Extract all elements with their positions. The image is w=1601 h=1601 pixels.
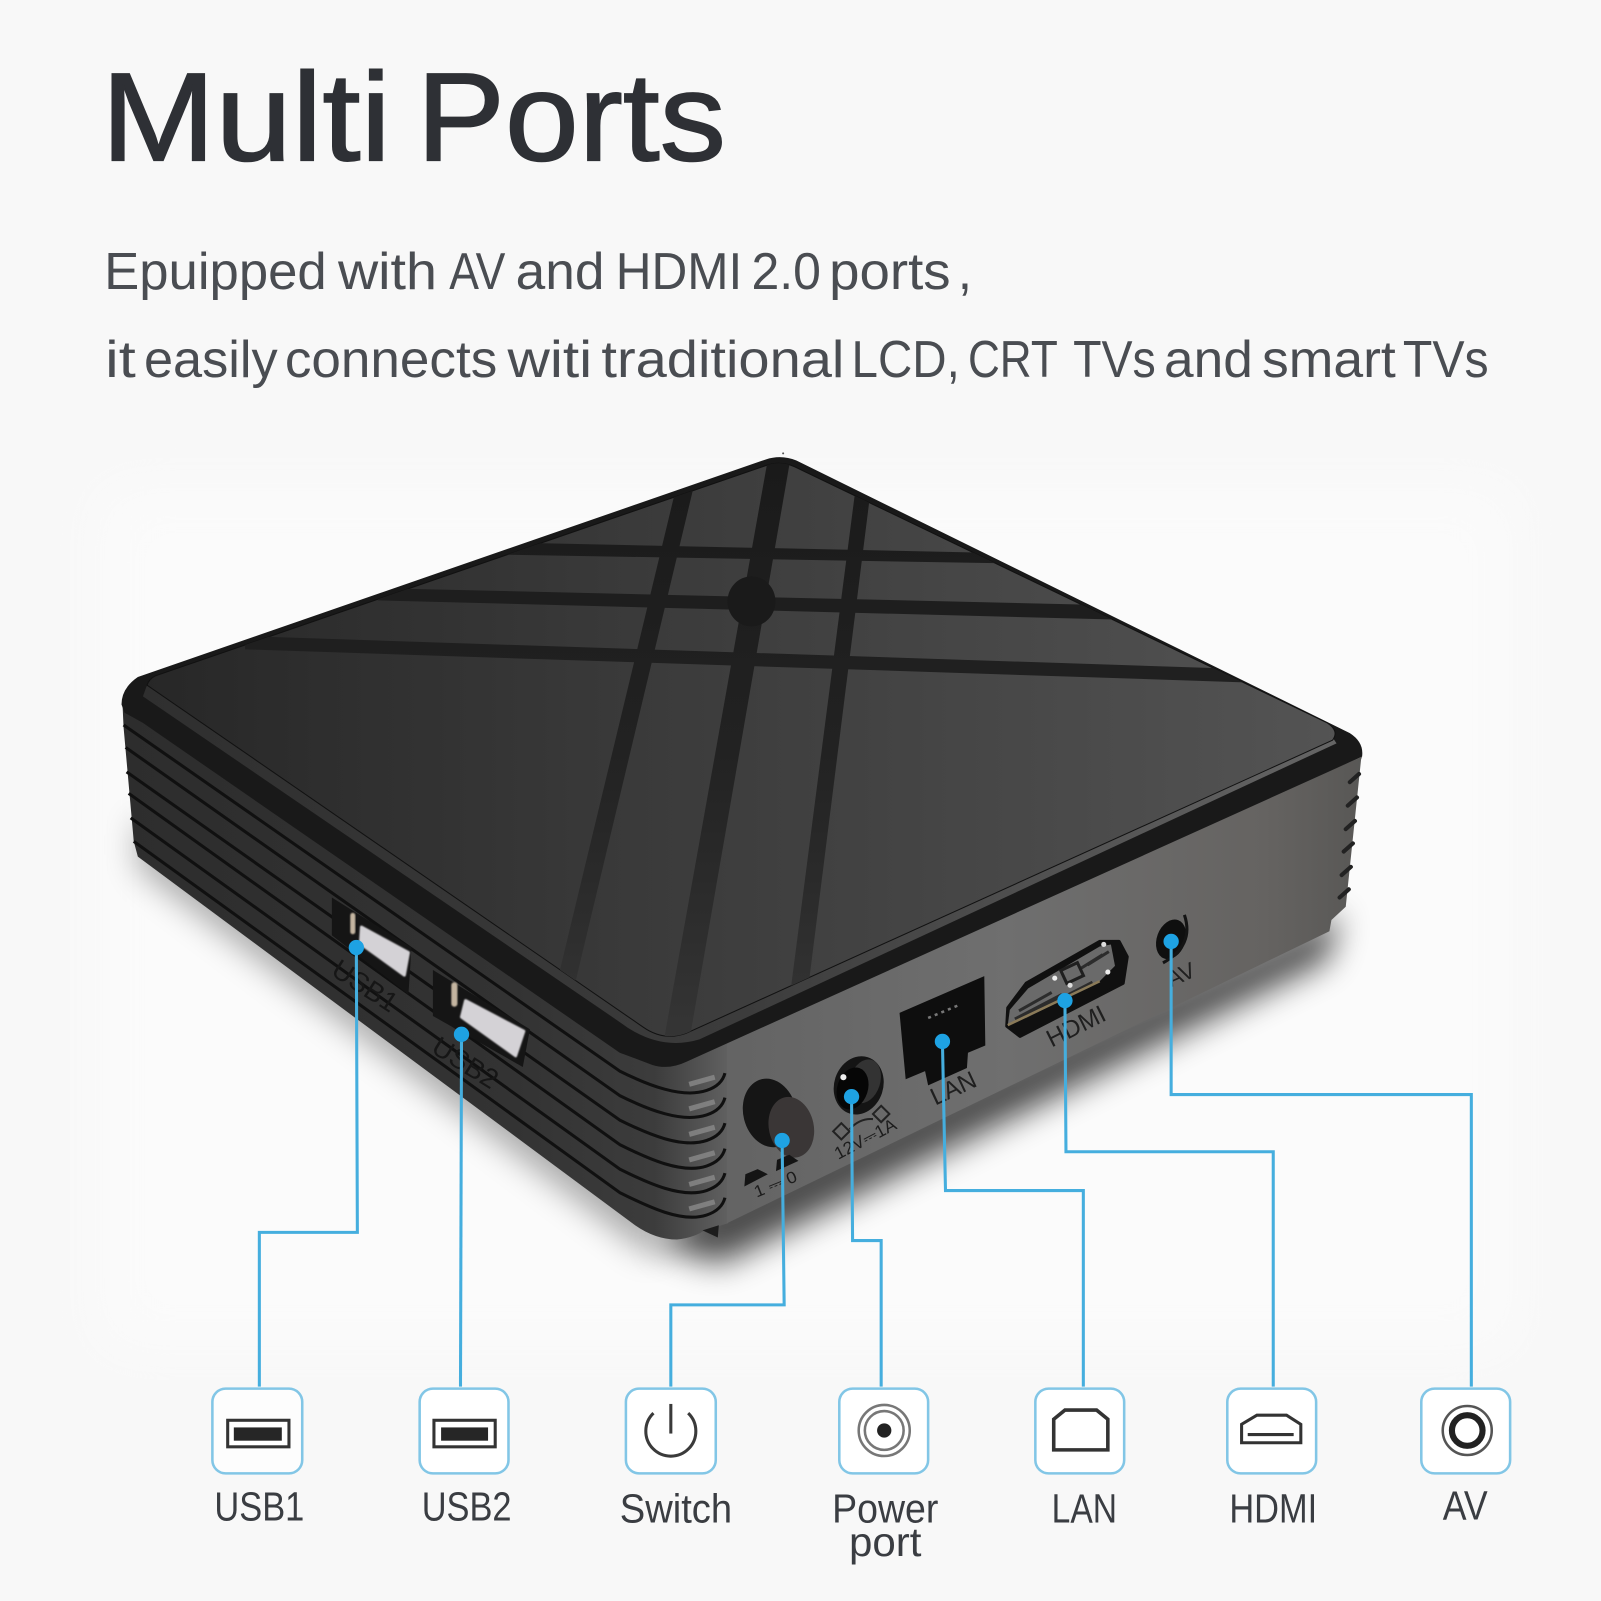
description line 1: AV [449, 243, 506, 301]
port: USB2 [420, 1389, 512, 1529]
description line 2: easily [144, 331, 278, 389]
label: USB1: USB1 [214, 1483, 304, 1529]
left shadow [138, 817, 664, 1258]
connector lines [259, 941, 1471, 1387]
front shadow [653, 914, 1340, 1264]
description line 1: Epuipped [104, 243, 327, 301]
description line 1: and [516, 243, 604, 301]
connector: Switch [671, 1141, 784, 1387]
label: LAN: LAN [1052, 1485, 1117, 1531]
description line 2: CRT [968, 331, 1058, 389]
label: USB2: USB2 [422, 1483, 512, 1529]
AV jack: AV [1163, 958, 1199, 992]
label: Power port: Power [832, 1485, 938, 1531]
title: Multi [101, 46, 391, 187]
device: TV box [122, 452, 1362, 1264]
port: HDMI [1227, 1389, 1317, 1531]
USB1 port: USB1 [327, 953, 404, 1018]
USB2 port [427, 970, 530, 1095]
switch knob [736, 1073, 820, 1201]
icon: HDMI socket [1242, 1415, 1301, 1443]
photo backdrop glow [102, 490, 1511, 1348]
label: Switch: Switch [620, 1485, 732, 1531]
description line 2: TVs [1403, 331, 1489, 389]
description line 2: TVs [1073, 331, 1156, 389]
power jack [826, 1050, 900, 1163]
description line 2: smart [1262, 331, 1396, 389]
label: HDMI: HDMI [1229, 1485, 1317, 1531]
port: USB1 [212, 1389, 304, 1529]
title [101, 46, 726, 187]
top face centre button [727, 576, 775, 626]
port: Power port [832, 1389, 938, 1565]
title: Ports [417, 46, 726, 187]
description line 1: with [337, 243, 437, 301]
icon: power symbol [646, 1404, 696, 1456]
icon: AV socket [1443, 1406, 1492, 1455]
description line 2: LCD, [852, 331, 960, 389]
description line 2: it [105, 331, 136, 389]
label: Power port: port [849, 1519, 922, 1565]
power jack: 12V⎓1A [831, 1114, 900, 1163]
connector: LAN [942, 1041, 1083, 1387]
description line 1 [104, 243, 972, 301]
connector: USB1 [259, 948, 357, 1387]
port: Switch [620, 1389, 732, 1531]
connector: HDMI [1065, 1001, 1273, 1387]
label: Power port [832, 1485, 938, 1565]
description line 1: 2.0 [751, 243, 821, 301]
left side face with ridges [123, 705, 729, 1240]
top face stripes [245, 459, 1266, 1041]
USB1 port [327, 897, 411, 1018]
port: LAN [1035, 1389, 1124, 1531]
AV jack [1151, 915, 1199, 992]
HDMI port [1007, 941, 1127, 1053]
LAN port: LAN [926, 1067, 981, 1111]
description line 2: traditional [601, 331, 844, 389]
apex speck [782, 452, 784, 454]
icon: USB2 [434, 1420, 495, 1447]
rim bevel [143, 685, 1337, 1043]
connector: USB2 [460, 1034, 462, 1387]
icon: USB1 [228, 1420, 289, 1447]
description line 2: connects [285, 331, 497, 389]
description line 2 [105, 331, 1489, 389]
connector: Power port [852, 1097, 881, 1387]
connector dots [349, 934, 1179, 1148]
corner notch [702, 1225, 719, 1238]
description line 2: and [1164, 331, 1253, 389]
description line 1: , [958, 243, 972, 301]
right edge ridges [1340, 774, 1359, 897]
description line 1: ports [829, 243, 951, 301]
description line 1: HDMI [616, 243, 742, 301]
connector: AV [1171, 941, 1471, 1387]
top face [147, 463, 1335, 1036]
black rim [122, 457, 1362, 1067]
icon: concentric power socket [859, 1405, 910, 1456]
description line 2: witi [506, 331, 592, 389]
LAN port [900, 976, 985, 1111]
front face [727, 757, 1362, 1223]
icon: LAN socket [1054, 1410, 1108, 1450]
HDMI port: HDMI [1042, 1001, 1110, 1053]
switch knob: 1 ⎓ 0 [751, 1168, 800, 1201]
USB2 port: USB2 [427, 1030, 504, 1095]
label: AV: AV [1443, 1482, 1488, 1528]
ridge highlights at corner [689, 1077, 715, 1209]
port: AV [1421, 1389, 1510, 1528]
